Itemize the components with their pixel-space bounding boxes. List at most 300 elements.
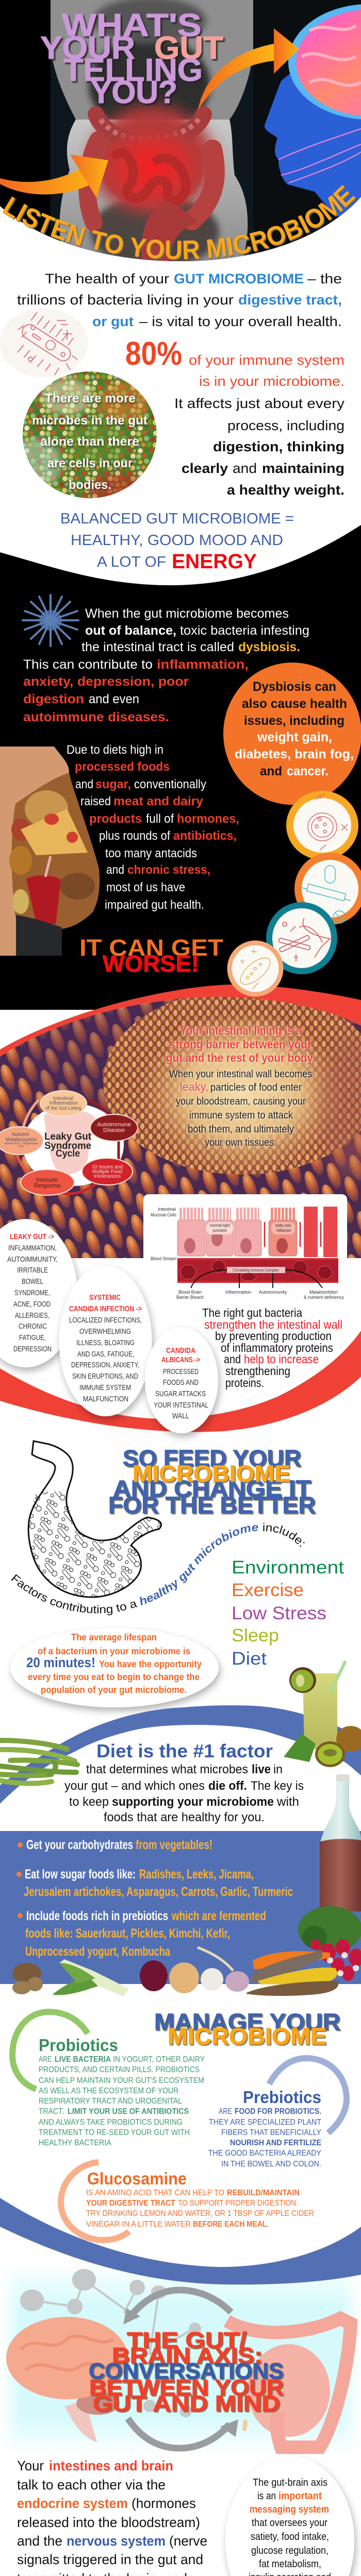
text block: right gut bacteria: proteins. [225,1376,264,1389]
tip: low sugar foods: Radishes, Leeks, Jicama, [139,1867,254,1882]
callout: more microbes than cells: alone than there [40,435,139,449]
bubble: systemic candida infection: LOCALIZED INFECTIONS, [69,1316,142,1325]
callout: dysbiosis health issues: issues, including [244,714,344,728]
text block: diet is the number one factor: in [273,1762,283,1776]
panel: probiotics: RESPIRATORY TRACT AND UROGENITAL [39,2097,182,2106]
callout: dysbiosis health issues: diabetes, brain fog, [235,747,354,761]
panel: probiotics: Probiotics [39,2036,118,2055]
tip: prebiotics [18,1909,266,1959]
text block: intestinal lining: When your intestinal wall becomes [169,1069,312,1080]
text block: diet is the number one factor: supporting your microbiome [112,1795,274,1809]
panel: prebiotics: THE GOOD BACTERIA ALREADY [208,2149,321,2158]
panel: prebiotics: NOURISH AND FERTILIZE [230,2139,321,2147]
heading: manage your microbiome: MICROBIOME [168,2023,326,2049]
diagram labels: Autoimmunity [259,1290,287,1295]
panel: probiotics [12,2012,205,2147]
callout: more microbes than cells: There are more [45,392,136,405]
title: GUT [154,30,223,66]
arrow: from arm into gut [0,155,108,198]
diagram: intestinal wall cross-section [143,1194,347,1305]
panel: probiotics: AND ALWAYS TAKE PROBIOTICS DURING [39,2118,183,2127]
callout: bacterium lifespan: of a bacterium in your microbiome is [38,1646,190,1656]
node: GI issues: GI Issues and [92,1164,123,1170]
diagram: leaky gut syndrome cycle [0,1091,138,1195]
healthy cells: junction [212,1228,227,1233]
callout: bacterium lifespan: You have the opportunity [99,1659,202,1669]
bubble: leaky gut: CHRONIC [19,1322,47,1331]
text block: right gut bacteria: help to increase [244,1352,319,1366]
bubble: gut brain axis messaging: satiety, food intake, [251,2531,329,2543]
panel: prebiotics: FIBERS THAT BENEFICIALLY [221,2128,321,2137]
bubble: systemic candida infection: ILLNESS, BLOATING [76,1338,135,1347]
panel: red band around intestinal lining [0,985,361,1432]
diagram labels: Barrier Breach [176,1295,204,1300]
hero black background [0,0,361,261]
callout: more microbes than cells: microbes in the gut [32,414,147,428]
list: healthy microbiome factors [232,1557,344,1669]
bubble: systemic candida infection: CANDIDA INFECTION -> [69,1304,142,1313]
bubble: leaky gut: SYNDROME, [14,1289,50,1297]
text block: causes of impaired gut: and [75,777,93,791]
callout: bacterium lifespan: population of your gut microbiome. [41,1685,187,1695]
text block: diet is the number one factor: with [276,1795,299,1809]
node: GI issues: Intolerances [94,1174,121,1179]
heading: so feed your microbiome: FOR THE BETTER [108,1492,316,1518]
node: immune response: Immune [36,1176,58,1183]
text block: dysbiosis definition: When the gut microbiome becomes [85,606,289,621]
node: nutrient malabsorption [0,1127,43,1155]
heading: balanced gut microbiome [60,511,294,573]
image: belly full of junk food [0,747,100,956]
node: immune response [21,1170,74,1195]
text block: dysbiosis definition: digestion [23,692,84,706]
image: kombucha bottle [320,1774,361,1911]
heading: it can get worse: WORSE! [103,951,199,977]
list: healthy microbiome factors: Low Stress [232,1603,326,1623]
text block: dysbiosis definition: anxiety, depression, poor [23,674,189,689]
text block: causes of impaired gut: Due to diets high in [67,743,163,757]
title: YOUR [40,30,135,66]
text block: intestines and brain: signals triggered in the gut and [17,2552,203,2567]
bubble: systemic candida infection: DEPRESSION, ANXIETY, [71,1361,139,1369]
icon: intestines [227,2318,351,2447]
leaky cells [265,1207,337,1257]
tip: low sugar foods [17,1867,293,1899]
text block: intestinal lining: leaky, [180,1080,208,1093]
node: autoimmune disease [90,1114,138,1141]
title [40,8,223,110]
text block: diet is the number one factor: live [252,1762,271,1776]
icon: bacillus ring [229,943,281,994]
callout: dysbiosis health issues: also cause health [242,697,347,711]
bubble: leaky gut: DEPRESSION [13,1345,52,1353]
heading: it can get worse: IT CAN GET [79,935,223,961]
heading: balanced gut microbiome: HEALTHY, GOOD MOOD AND [71,532,283,549]
list: diet tips [17,1838,293,1959]
text block: intestinal lining: both them, and ultimately [188,1124,294,1135]
icon: carrots [247,1950,338,1996]
bubble: systemic candida infection: SKIN ERUPTIONS, AND [72,1372,138,1381]
bubble: candida albicans: FOODS AND [163,1378,199,1387]
bubble: leaky gut: INFLAMMATION, [8,1244,57,1252]
heading: so feed your microbiome: SO FEED YOUR [123,1445,301,1471]
text block: causes of impaired gut: sugar, [95,777,131,791]
icon: virus [23,595,78,646]
bubble: systemic candida infection: IMMUNE SYSTEM [79,1383,131,1392]
diagram labels: Malabsorbtion [309,1290,338,1295]
text block: dysbiosis definition: and even [89,692,139,706]
bubble: candida albicans: YOUR INTESTINAL [154,1401,208,1410]
title: TELLING [63,53,203,88]
text block: dysbiosis definition: autoimmune diseases. [23,710,169,724]
panel: probiotics: LIVE BACTERIA [55,2055,111,2064]
icon: cell ring [290,793,355,856]
panel: prebiotics: THEY ARE SPECIALIZED PLANT [209,2118,321,2127]
panel: prebiotics: Prebiotics [243,2088,321,2107]
icon: garlic and onions [140,1947,249,1993]
icon: blue head with brain [265,4,361,216]
bubble: gut brain axis messaging: important [278,2490,322,2502]
intro text: gut microbiome [17,271,342,329]
heading: the gut brain axis: GUT AND MIND [93,2391,280,2416]
text block: diet is the number one factor: The key is [251,1779,304,1793]
bubble: systemic candida infection: AND GAS, FATIGUE, [77,1350,134,1359]
panel: probiotics: PRODUCTS, AND CERTAIN PILLS. PROBIOTICS [39,2065,200,2074]
bubble: leaky gut: IRRITABLE [17,1266,48,1275]
text block: dysbiosis definition: the intestinal tract is called [81,640,234,654]
heading: manage your microbiome: MANAGE YOUR [154,2009,340,2035]
bubble: gut brain axis messaging: that oversees your [252,2517,327,2529]
text block: causes of impaired gut: raised [80,794,111,808]
blood vessel: Circulating Immune Complex [233,1268,279,1273]
callout: dysbiosis health issues: and [260,764,282,778]
icon: jerusalem artichokes [12,1963,43,1994]
callout: bacterium lifespan: every time you eat to begin to change the [28,1672,200,1682]
panel: prebiotics [208,2058,347,2168]
tip: prebiotics: which are fermented [171,1909,266,1923]
panel: probiotics: HEALTHY BACTERIA [39,2139,111,2147]
text block: causes of impaired gut: meat and dairy [113,794,204,808]
text block: intestines and brain: (hormones [132,2496,196,2511]
callout: dysbiosis health issues: cancer. [287,764,329,778]
diagram labels: Intestinal [158,1207,176,1212]
blood vessel [177,1258,338,1288]
heading: it can get worse [79,935,223,977]
panel: blue diet section [0,1705,361,1984]
icon: dna ring [269,905,334,971]
text block: intestines and brain: nervous system [67,2533,166,2549]
heading: the gut brain axis: BETWEEN YOUR [89,2375,284,2400]
text block: what the microbiome affects: a healthy weight. [227,482,344,498]
circular arrows [123,2290,238,2448]
glucosamine arc [61,2162,129,2240]
cycle title: Cycle [56,1148,80,1159]
panel: probiotics: IN YOGURT, OTHER DAIRY [113,2055,205,2064]
node: GI issues: Multiple Food [92,1169,122,1175]
panel: prebiotics: IN THE BOWEL AND COLON. [221,2160,321,2168]
cyan background for gut brain section [0,2262,361,2455]
icon: bacterium [0,308,88,377]
text block: causes of impaired gut: most of us have [106,880,185,894]
tip: low sugar foods: Eat low sugar foods like: [25,1867,136,1882]
node: intestinal inflammation: of the Gut Lining [45,1106,81,1111]
diagram labels [151,1207,344,1300]
bubble: gut brain axis messaging: is an [257,2490,276,2502]
node: nutrient malabsorption: Nutrient [12,1132,29,1138]
intro text: gut microbiome: digestive tract, [238,292,342,308]
heading: balanced gut microbiome: BALANCED GUT MICROBIOME = [60,511,294,527]
text block: right gut bacteria: of inflammatory proteins [221,1341,333,1354]
text block: intestinal lining [166,1024,315,1148]
text block: causes of impaired gut: conventionally [134,777,206,791]
icon: brain [6,2317,128,2442]
text block: what the microbiome affects [174,396,345,498]
panel: glucosamine: TRY DRINKING LEMON AND WATER, OR 1 TBSP OF APPLE CIDER [86,2209,314,2218]
panel: probiotics: TRACT. [39,2107,64,2116]
callout: dysbiosis health issues: Dysbiosis can [253,680,336,694]
text block: dysbiosis definition [23,606,309,724]
text block: what the microbiome affects: process, including [227,418,344,433]
text block: causes of impaired gut: products [89,812,142,826]
image: kiwi smoothie [284,1661,361,1767]
healthy cells: normal tight [210,1223,231,1228]
bubble: systemic candida infection: OVERWHELMING [79,1327,131,1336]
text block: intestines and brain: endocrine system [17,2496,128,2511]
text block: dysbiosis definition: dysbiosis. [238,640,300,654]
panel: glucosamine: VINEGAR IN A LITTLE WATER [86,2220,191,2229]
panel: glucosamine: Glucosamine [87,2169,187,2188]
node: GI issues [82,1158,133,1185]
heading: balanced gut microbiome: A LOT OF [97,554,166,570]
text block: diet is the number one factor: to keep [69,1795,109,1809]
image: intestinal villi [0,989,361,1258]
text block: right gut bacteria: and [224,1352,241,1366]
text block: causes of impaired gut: chronic stress, [127,863,210,877]
bubble: systemic candida infection: MALFUNCTION [83,1395,128,1403]
curved caption: factors: Factors contributing to a healthy gut microbiome include: [11,1523,305,1616]
icon: stomach with microbes [28,1441,161,1597]
image: radishes [298,1906,361,1981]
text block: diet is the number one factor: Diet is the #1 factor [96,1740,273,1761]
title: WHAT'S [62,8,202,43]
heading: manage your microbiome [154,2009,340,2049]
node: autoimmune disease: Disease [103,1127,125,1133]
heading: so feed your microbiome: AND CHANGE IT [113,1476,311,1502]
panel: glucosamine [61,2162,314,2240]
stat: 80 percent: is in your microbiome. [199,374,344,389]
text block: intestinal lining: particles of food enter [210,1082,302,1093]
prebiotics arc [269,2058,347,2133]
text block: intestinal lining: immune system to attack [189,1110,293,1121]
decorative blue swoosh [0,2198,361,2284]
list: healthy microbiome factors: Sleep [232,1625,279,1646]
text block: right gut bacteria: strengthening [225,1364,290,1378]
stat: 80 percent: 80% [125,335,182,372]
bubble: gut brain axis messaging: fat metabolism, [259,2558,321,2570]
tip: carbohydrates: Get your carbohydrates [26,1838,133,1852]
panel: probiotics: ARE [39,2055,52,2064]
text block: intestines and brain: Your [17,2458,44,2473]
heading: the gut brain axis [89,2328,284,2416]
arrow: gut to brain [198,28,299,110]
tip: prebiotics: foods like: Sauerkraut, Pickles, Kimchi, Kefir, [25,1926,230,1941]
node: nutrient malabsorption: Vitamin B12 · Magnesium [4,1142,38,1145]
panel: probiotics: TREATMENT TO RE-SEED YOUR GUT WITH [39,2128,190,2137]
diagram labels: Blood Brain [178,1290,202,1295]
icon: leek [53,1959,129,1996]
panel: hero anatomy scene [0,0,361,261]
node: intestinal inflammation: Intestinal [53,1096,73,1101]
text block: right gut bacteria: strengthen the intestinal wall [204,1318,342,1331]
callout: more microbes than cells: are cells in our [47,456,133,470]
callout: more microbes than cells: bodies. [69,478,111,492]
list: healthy microbiome factors: Exercise [232,1580,304,1600]
node: nutrient malabsorption: Iron [19,1145,24,1148]
text block: intestines and brain: released into the bloodstream) [17,2515,200,2530]
text block: intestines and brain: (nerve [169,2533,207,2549]
intestine silhouette [44,1110,95,1174]
node: nutrient malabsorption: Malabsorption [6,1137,37,1143]
diagram labels: & nutrient deficiency [304,1295,344,1300]
intro text: gut microbiome: – the [307,271,342,286]
panel: glucosamine: YOUR DIGESTIVE TRACT [86,2199,175,2208]
diagram labels: Blood Stream [151,1256,176,1261]
intro text: gut microbiome: GUT MICROBIOME [174,271,304,286]
text block: intestinal lining: Your intestinal lining is a [180,1024,302,1037]
stat: 80 percent [125,335,344,389]
bubble: systemic candida infection [59,1266,152,1416]
tip: carbohydrates: from vegetables! [136,1838,212,1852]
image: asparagus [0,1740,77,1784]
bubble: gut brain axis messaging: The gut-brain axis [253,2477,327,2488]
bubble: candida albicans: SUGAR ATTACKS [155,1389,206,1398]
molecule network [21,2270,200,2416]
panel: dark dysbiosis section [0,525,361,1010]
text block: diet is the number one factor: die off. [208,1779,247,1793]
panel: glucosamine: REBUILD/MAINTAIN [227,2189,300,2197]
text block: dysbiosis definition: inflammation, [157,657,249,672]
bubble: leaky gut: FATIGUE, [19,1333,46,1342]
text block: right gut bacteria: by preventing production [215,1329,332,1343]
text block: causes of impaired gut: full of [146,812,174,826]
text block: causes of impaired gut: processed foods [75,760,170,774]
bubble: leaky gut: ALLERGIES, [15,1311,50,1320]
heading: so feed your microbiome: MICROBIOME [133,1461,290,1487]
panel: probiotics: CAN HELP MAINTAIN YOUR GUT'S ECOSYSTEM [39,2076,204,2085]
text block: intestinal lining: strong barrier between your [170,1038,311,1051]
text block: diet is the number one factor [64,1740,304,1824]
bubble: leaky gut: LEAKY GUT -> [10,1232,54,1241]
tip: prebiotics: Include foods rich in prebiotics [26,1909,168,1923]
text block: what the microbiome affects: and [233,461,257,476]
intro text: gut microbiome: – is vital to your overall health. [139,314,342,329]
list: healthy microbiome factors: Environment [232,1557,344,1578]
stat: 80 percent: of your immune system [189,352,344,368]
callout: dysbiosis health issues [223,663,361,805]
heading: the gut brain axis: BRAIN AXIS: [112,2343,262,2368]
node: immune response: Response [34,1182,61,1189]
bubble: leaky gut: ACNE, FOOD [13,1300,51,1309]
text block: causes of impaired gut: hormones, [177,812,239,826]
panel: probiotics: LIMIT YOUR USE OF ANTIBIOTICS [68,2107,189,2116]
text block: intestines and brain: talk to each other via the [17,2477,166,2493]
node: autoimmune disease: Autoimmune [97,1122,131,1128]
bubble: candida albicans [145,1327,218,1433]
probiotics arc [12,2012,88,2089]
panel: probiotics: AS WELL AS THE ECOSYSTEM OF YOUR [39,2087,178,2095]
text block: causes of impaired gut: antibiotics, [173,829,237,843]
bubble: leaky gut: BOWEL [22,1277,43,1286]
bubble: leaky gut: AUTOIMMUNITY, [7,1255,58,1264]
bubble: systemic candida infection: SYSTEMIC [89,1293,121,1302]
text block: what the microbiome affects: clearly [182,461,228,476]
diagram labels: Inflammation [225,1290,251,1295]
heading: the gut brain axis: THE GUT/ [127,2328,247,2353]
title: YOU? [91,75,177,110]
panel: glucosamine: TO SUPPORT PROPER DIGESTION. [178,2199,298,2208]
image: vegetables row [12,1947,338,1996]
icon group: medical rings [229,793,361,994]
text block: what the microbiome affects: digestion, thinking [213,439,344,454]
callout: bacterium lifespan: The average lifespan [71,1632,157,1642]
heading: so feed your microbiome [108,1445,316,1518]
bubble: gut brain axis messaging: glucose regulation, [251,2545,329,2556]
diagram labels: Mucosal Cells [151,1212,176,1217]
panel: prebiotics: ARE [219,2107,232,2116]
bubble: gut brain axis messaging: messaging system [250,2504,329,2515]
text block: right gut bacteria [202,1306,342,1389]
bubble: candida albicans: PROCESSED [163,1367,199,1376]
text block: intestines and brain: intestines and brain [49,2458,173,2473]
bubble: candida albicans: WALL [172,1412,189,1420]
text block: causes of impaired gut: too many antacids [105,846,197,860]
icon: syringe ring [298,856,361,923]
leaky cells: leaky and [275,1223,291,1228]
cycle title [44,1131,92,1159]
intro text: gut microbiome: The health of your [45,271,169,286]
panel: glucosamine: IS AN AMINO ACID THAT CAN HELP TO [86,2189,224,2197]
heading: the gut brain axis: CONVERSATIONS [89,2359,284,2384]
text block: diet is the number one factor: foods that are healthy for you. [104,1810,265,1824]
callout: bacterium lifespan: 20 minutes! [26,1655,95,1670]
text block: intestinal lining: gut and the rest of your body. [166,1051,315,1064]
hero illustration: torso and intestines [51,0,361,268]
text block: diet is the number one factor: your gut – and which ones [64,1779,205,1793]
text block: right gut bacteria: The right gut bacteria [202,1306,302,1319]
cycle title: Leaky Gut [44,1131,92,1142]
panel: glucosamine: BEFORE EACH MEAL. [193,2220,269,2229]
bubble: candida albicans: ALBICANS -> [161,1355,200,1364]
text block: diet is the number one factor: that determines what microbes [86,1762,248,1776]
cycle title: Syndrome [44,1141,91,1151]
text block: causes of impaired gut: plus rounds of [99,829,170,843]
callout: bacterium lifespan [10,1628,219,1707]
panel: prebiotics: FOOD FOR PROBIOTICS. [235,2107,321,2116]
node: intestinal inflammation: Inflammation [50,1100,78,1106]
text block: causes of impaired gut: and [106,863,124,877]
text block: intestinal lining: your bloodstream, causing your [176,1096,306,1107]
text block: intestines and brain [17,2458,207,2576]
text block: causes of impaired gut [67,743,239,912]
tip: prebiotics: Unprocessed yogurt, Kombucha [25,1944,171,1959]
text block: dysbiosis definition: toxic bacteria infesting [180,623,309,638]
healthy cells [177,1214,261,1256]
callout: more microbes than cells [23,371,157,498]
intro text: gut microbiome: or gut [92,314,134,329]
bubble: gut brain axis messaging [225,2456,354,2576]
leaky cells: inflamed [276,1228,291,1233]
bubble: candida albicans: CANDIDA [166,1346,195,1355]
